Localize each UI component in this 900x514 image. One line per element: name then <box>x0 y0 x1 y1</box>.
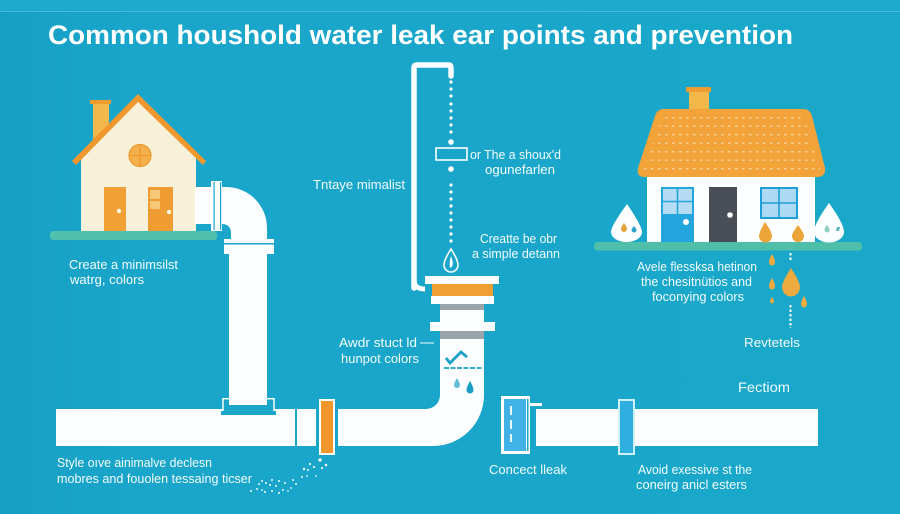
panel: stacked fittings <box>425 276 499 339</box>
icon: check and water line on pipe <box>444 352 482 394</box>
label: lower left: mobres and fouolen tessaing ticser <box>57 472 252 486</box>
label: fitting <box>339 336 434 366</box>
blue coupling <box>618 399 635 455</box>
label: blue valve: Concect lleak <box>489 463 568 477</box>
pipe: main horizontal right <box>536 409 818 446</box>
pipe: main horizontal left <box>56 390 335 455</box>
house body <box>647 175 815 242</box>
roof <box>638 109 825 177</box>
panel: left house <box>50 94 217 240</box>
label: drop: Creatte be obr <box>480 232 557 246</box>
leak spray particles <box>250 458 327 494</box>
house body <box>81 100 196 231</box>
icon: white drop left <box>611 204 642 242</box>
label: right house: foconying colors <box>652 290 744 304</box>
label: right house: the chesitnütios and <box>641 275 752 289</box>
thin pipe foot <box>414 280 425 289</box>
round window <box>128 144 152 167</box>
title: Common houshold water leak ear points and prevention <box>48 20 793 50</box>
pipe: elbow and vertical run <box>195 181 274 404</box>
label: lower left <box>57 456 252 486</box>
label: valve box <box>470 148 561 177</box>
collar <box>224 239 274 254</box>
thin supply pipe <box>414 65 451 288</box>
icon: falling leak drops <box>769 253 807 328</box>
ground bar <box>594 242 862 250</box>
elbow flange <box>211 181 222 231</box>
label: drop <box>472 232 560 261</box>
label: right house: Avele flessksa hetinon <box>637 260 757 274</box>
label: falling drops: Revtetels <box>744 336 800 350</box>
blue valve with gauge <box>501 396 542 454</box>
window <box>760 187 798 219</box>
icon: orange drops on wall <box>759 222 804 242</box>
icon: white drop right <box>814 203 844 242</box>
chimney <box>686 87 711 110</box>
valve box <box>436 148 467 160</box>
label: right house <box>637 260 757 304</box>
label: drop: a simple detann <box>472 247 560 261</box>
label: right pipe: Fectiom <box>738 379 790 395</box>
panel: right house <box>594 87 862 250</box>
label: lower left: Style oıve ainimalve declesn <box>57 456 212 470</box>
label: valve box: ogunefarlen <box>485 163 555 177</box>
dotted water line <box>448 80 454 243</box>
vertical pipe <box>229 254 267 404</box>
elbow <box>222 187 267 240</box>
ground bar <box>50 231 217 240</box>
blue door <box>661 187 694 242</box>
door right <box>148 187 173 231</box>
orange coupling <box>319 399 335 455</box>
door left <box>104 187 126 231</box>
label: left house: Create a minimsilst <box>69 258 179 272</box>
pipe: central elbow <box>338 339 484 446</box>
label: lower right <box>636 463 752 492</box>
label: fitting: Awdr stuct ld <box>339 336 417 350</box>
label: fitting: hunpot colors <box>341 352 419 366</box>
chimney <box>90 100 111 143</box>
label: supply pipe: Tntaye mimalist <box>313 178 406 192</box>
label: lower right: Avoid exessive st the <box>638 463 752 477</box>
roof <box>72 94 206 165</box>
label: valve box: or The a shoux'd <box>470 148 561 162</box>
label: left house <box>69 258 179 287</box>
icon: water drop <box>444 249 458 272</box>
dark door <box>709 187 737 242</box>
label: left house: watrg, colors <box>69 273 144 287</box>
label: lower right: coneirg anicl esters <box>636 478 747 492</box>
base flange <box>221 390 276 415</box>
